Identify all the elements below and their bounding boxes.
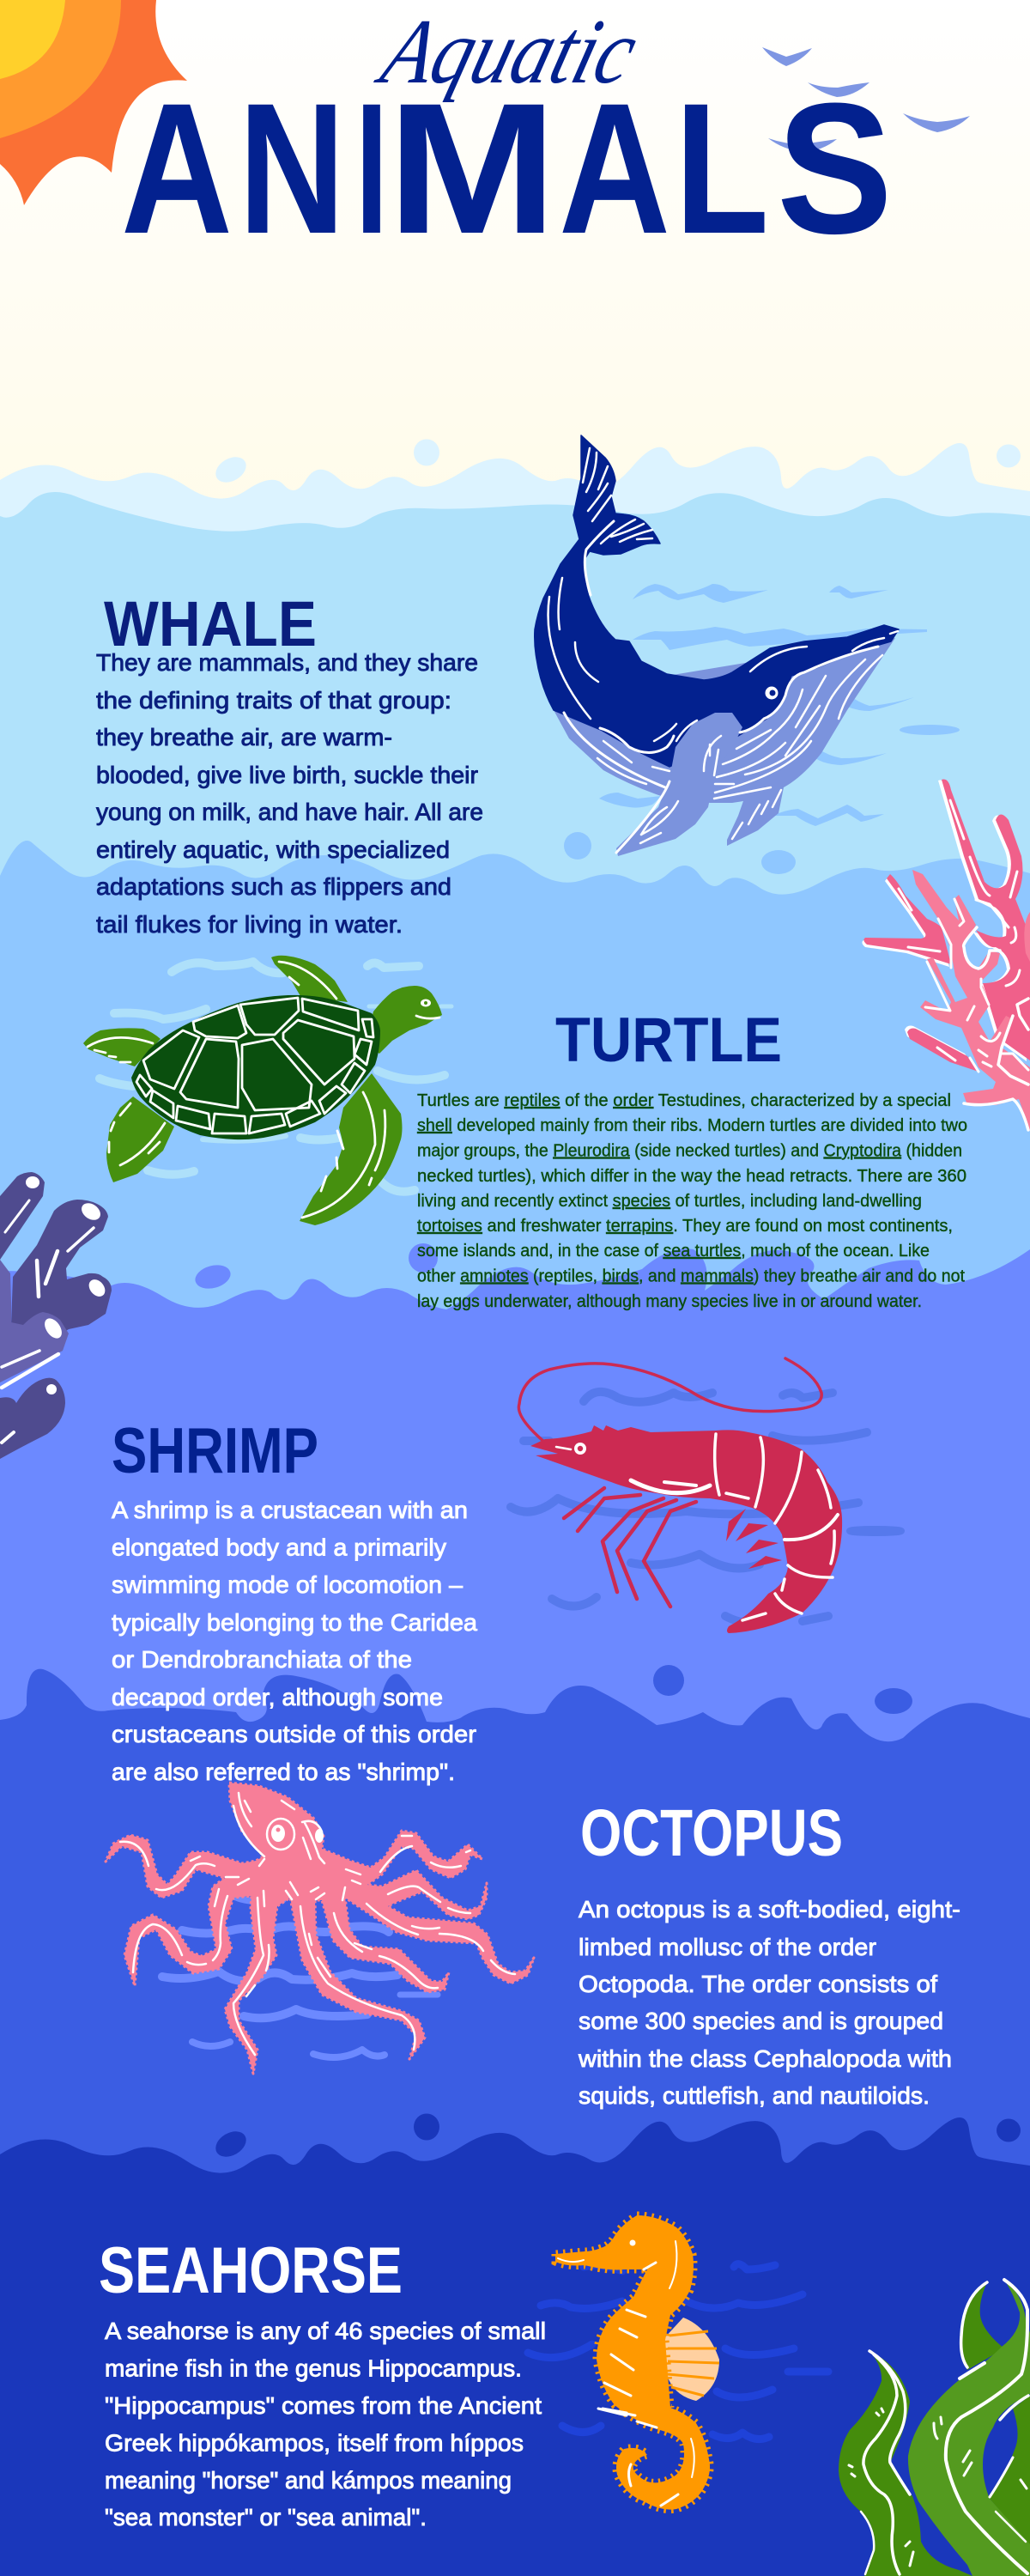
icon: sun xyxy=(0,0,187,205)
shrimp heading: SHRIMP xyxy=(112,1414,318,1486)
icon: whale xyxy=(535,435,899,856)
title xyxy=(121,0,893,272)
octopus text: some 300 species and is grouped xyxy=(579,2008,943,2034)
octopus text: limbed mollusc of the order xyxy=(579,1934,876,1960)
seahorse text: marine fish in the genus Hippocampus. xyxy=(105,2354,522,2382)
title: S xyxy=(777,64,893,272)
icon: seahorse xyxy=(555,2215,719,2510)
octopus ripples xyxy=(162,1896,438,2057)
seahorse text xyxy=(105,2318,546,2530)
icon: octopus xyxy=(106,1783,534,2074)
shrimp text: are also referred to as "shrimp". xyxy=(112,1759,455,1785)
title: L xyxy=(675,64,769,272)
coral: pink xyxy=(862,780,1030,1131)
octopus text: squids, cuttlefish, and nautiloids. xyxy=(579,2082,930,2109)
turtle text xyxy=(417,1091,967,1311)
turtle text: shell developed mainly from their ribs. Modern turtles are divided into two xyxy=(417,1116,967,1135)
turtle text: Turtles are reptiles of the order Testudines, characterized by a special xyxy=(417,1091,951,1110)
whale heading: WHALE xyxy=(104,588,317,659)
whale text: tail flukes for living in water. xyxy=(96,911,403,938)
seahorse ripples xyxy=(528,2264,828,2439)
title: N xyxy=(239,64,345,272)
turtle text: tortoises and freshwater terrapins. They are found on most continents, xyxy=(417,1217,953,1236)
octopus text: Octopoda. The order consists of xyxy=(579,1971,937,1997)
icon: birds xyxy=(762,47,970,152)
seahorse text: meaning "horse" and kámpos meaning xyxy=(105,2467,512,2494)
background sky xyxy=(0,0,1030,532)
shrimp text: decapod order, although some xyxy=(112,1684,443,1710)
title: A xyxy=(121,64,233,272)
whale text: young on milk, and have hair. All are xyxy=(96,799,483,825)
seahorse text: "Hippocampus" comes from the Ancient xyxy=(105,2392,542,2419)
whale text: the defining traits of that group: xyxy=(96,687,451,714)
whale text: adaptations such as flippers and xyxy=(96,873,451,900)
turtle text: some islands and, in the case of sea turtles, much of the ocean. Like xyxy=(417,1242,930,1261)
shrimp text: swimming mode of locomotion – xyxy=(112,1571,463,1598)
whale text: entirely aquatic, with specialized xyxy=(96,836,450,863)
octopus text xyxy=(578,1896,960,2109)
octopus heading: OCTOPUS xyxy=(580,1796,843,1870)
whale text xyxy=(96,649,483,938)
icon: shrimp xyxy=(518,1358,842,1633)
whale text: they breathe air, are warm- xyxy=(96,724,392,750)
seahorse text: Greek hippókampos, itself from híppos xyxy=(105,2430,524,2456)
shrimp text: elongated body and a primarily xyxy=(112,1534,446,1561)
shrimp ripples xyxy=(511,1392,901,1622)
turtle text: other amniotes (reptiles, birds, and mammals) they breathe air and do not xyxy=(417,1267,965,1286)
whale text: blooded, give live birth, suckle their xyxy=(96,762,478,788)
octopus text: An octopus is a soft-bodied, eight- xyxy=(579,1896,960,1923)
turtle heading: TURTLE xyxy=(555,1005,782,1075)
shrimp text: A shrimp is a crustacean with an xyxy=(112,1497,468,1523)
whale ripples xyxy=(599,584,960,826)
turtle text: living and recently extinct species of turtles, including land-dwelling xyxy=(417,1192,922,1211)
title: A xyxy=(559,64,670,272)
whale text: They are mammals, and they share xyxy=(96,649,478,676)
seahorse text: "sea monster" or "sea animal". xyxy=(105,2504,427,2530)
seahorse text: A seahorse is any of 46 species of small xyxy=(105,2318,546,2344)
title: I xyxy=(355,64,388,272)
turtle text: lay eggs underwater, although many species live in or around water. xyxy=(417,1292,922,1311)
turtle text: necked turtles), which differ in the way the head retracts. There are 360 xyxy=(417,1167,966,1186)
shrimp text xyxy=(112,1497,477,1785)
icon: turtle xyxy=(83,956,442,1225)
title: Aquatic xyxy=(367,0,649,103)
turtle text: major groups, the Pleurodira (side necked turtles) and Cryptodira (hidden xyxy=(417,1142,962,1161)
shrimp text: or Dendrobranchiata of the xyxy=(112,1646,412,1673)
seahorse heading: SEAHORSE xyxy=(99,2234,403,2307)
icon: seaweed xyxy=(839,2280,1030,2576)
shrimp text: crustaceans outside of this order xyxy=(112,1721,476,1747)
coral: purple xyxy=(0,1172,112,1459)
shrimp text: typically belonging to the Caridea xyxy=(112,1609,477,1636)
octopus text: within the class Cephalopoda with xyxy=(578,2045,952,2072)
title: M xyxy=(387,64,557,272)
turtle ripples xyxy=(100,962,451,1192)
